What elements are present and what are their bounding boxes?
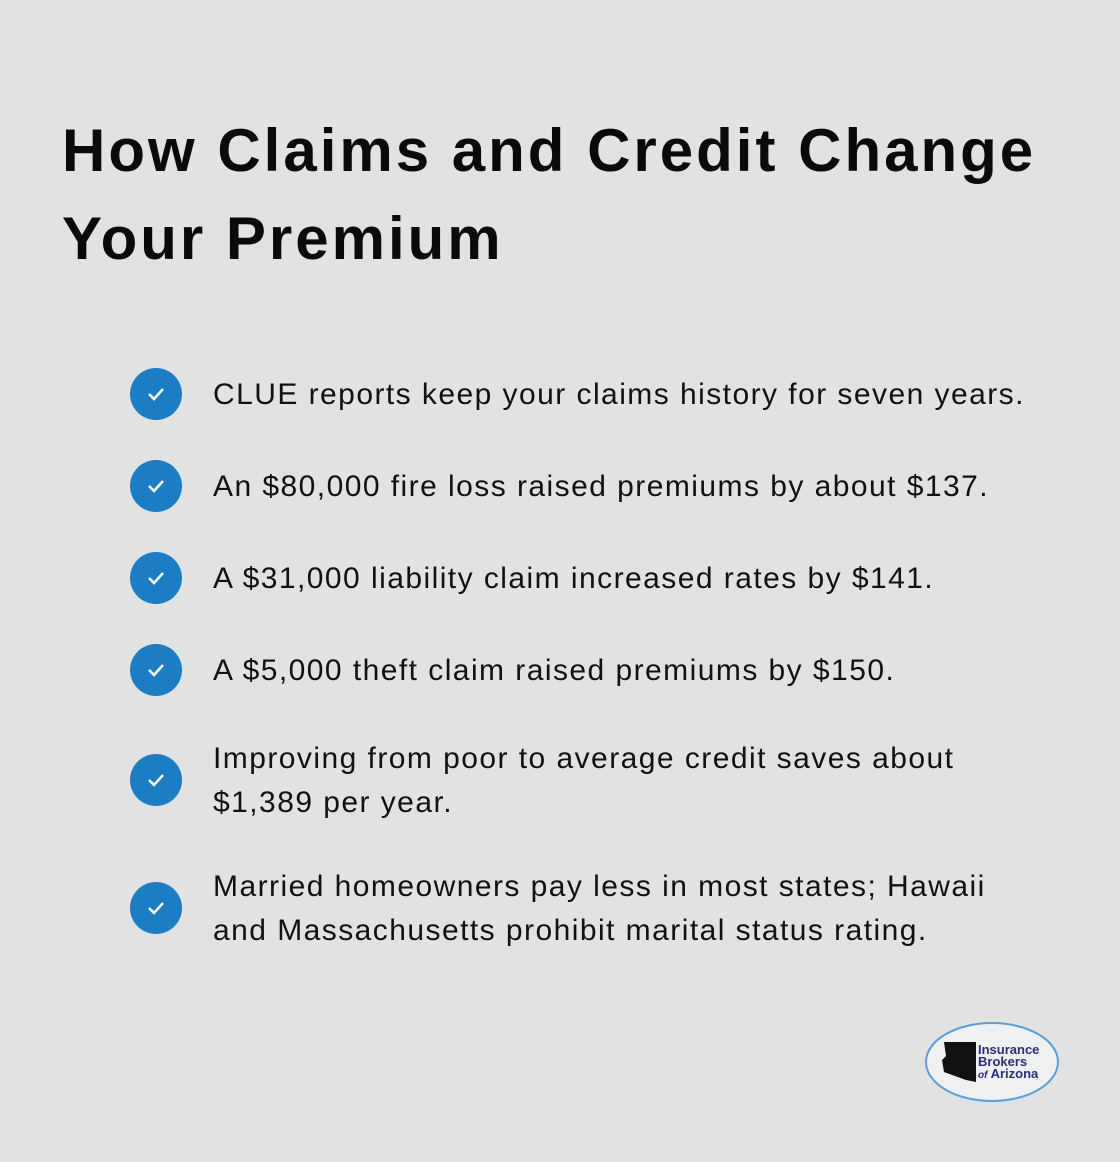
icon: check <box>130 368 182 420</box>
icon: check <box>130 882 182 934</box>
text <box>213 742 954 819</box>
title: How Claims and Credit Change <box>62 117 1036 184</box>
title <box>62 117 1036 272</box>
item 3 <box>130 552 934 604</box>
item 2 <box>130 460 989 512</box>
item 1 <box>130 368 1025 420</box>
logo: Brokers <box>978 1054 1027 1069</box>
text <box>213 870 986 947</box>
item 4 <box>130 644 895 696</box>
text: $1,389 per year. <box>213 786 453 819</box>
logo: of Arizona <box>978 1066 1039 1081</box>
logo <box>925 1022 1059 1102</box>
item 6 <box>130 870 986 947</box>
title: Your Premium <box>62 205 504 272</box>
item 5 <box>130 742 954 819</box>
text: A $5,000 theft claim raised premiums by $150. <box>213 654 895 687</box>
logo: Insurance <box>978 1042 1039 1057</box>
icon: check <box>130 644 182 696</box>
icon: check <box>130 552 182 604</box>
text: A $31,000 liability claim increased rates by $141. <box>213 562 934 595</box>
icon: check <box>130 460 182 512</box>
text: and Massachusetts prohibit marital status rating. <box>213 914 928 947</box>
text: CLUE reports keep your claims history for seven years. <box>213 378 1025 411</box>
icon: check <box>130 754 182 806</box>
text: An $80,000 fire loss raised premiums by about $137. <box>213 470 989 503</box>
text: Married homeowners pay less in most states; Hawaii <box>213 870 986 903</box>
text: Improving from poor to average credit saves about <box>213 742 954 775</box>
